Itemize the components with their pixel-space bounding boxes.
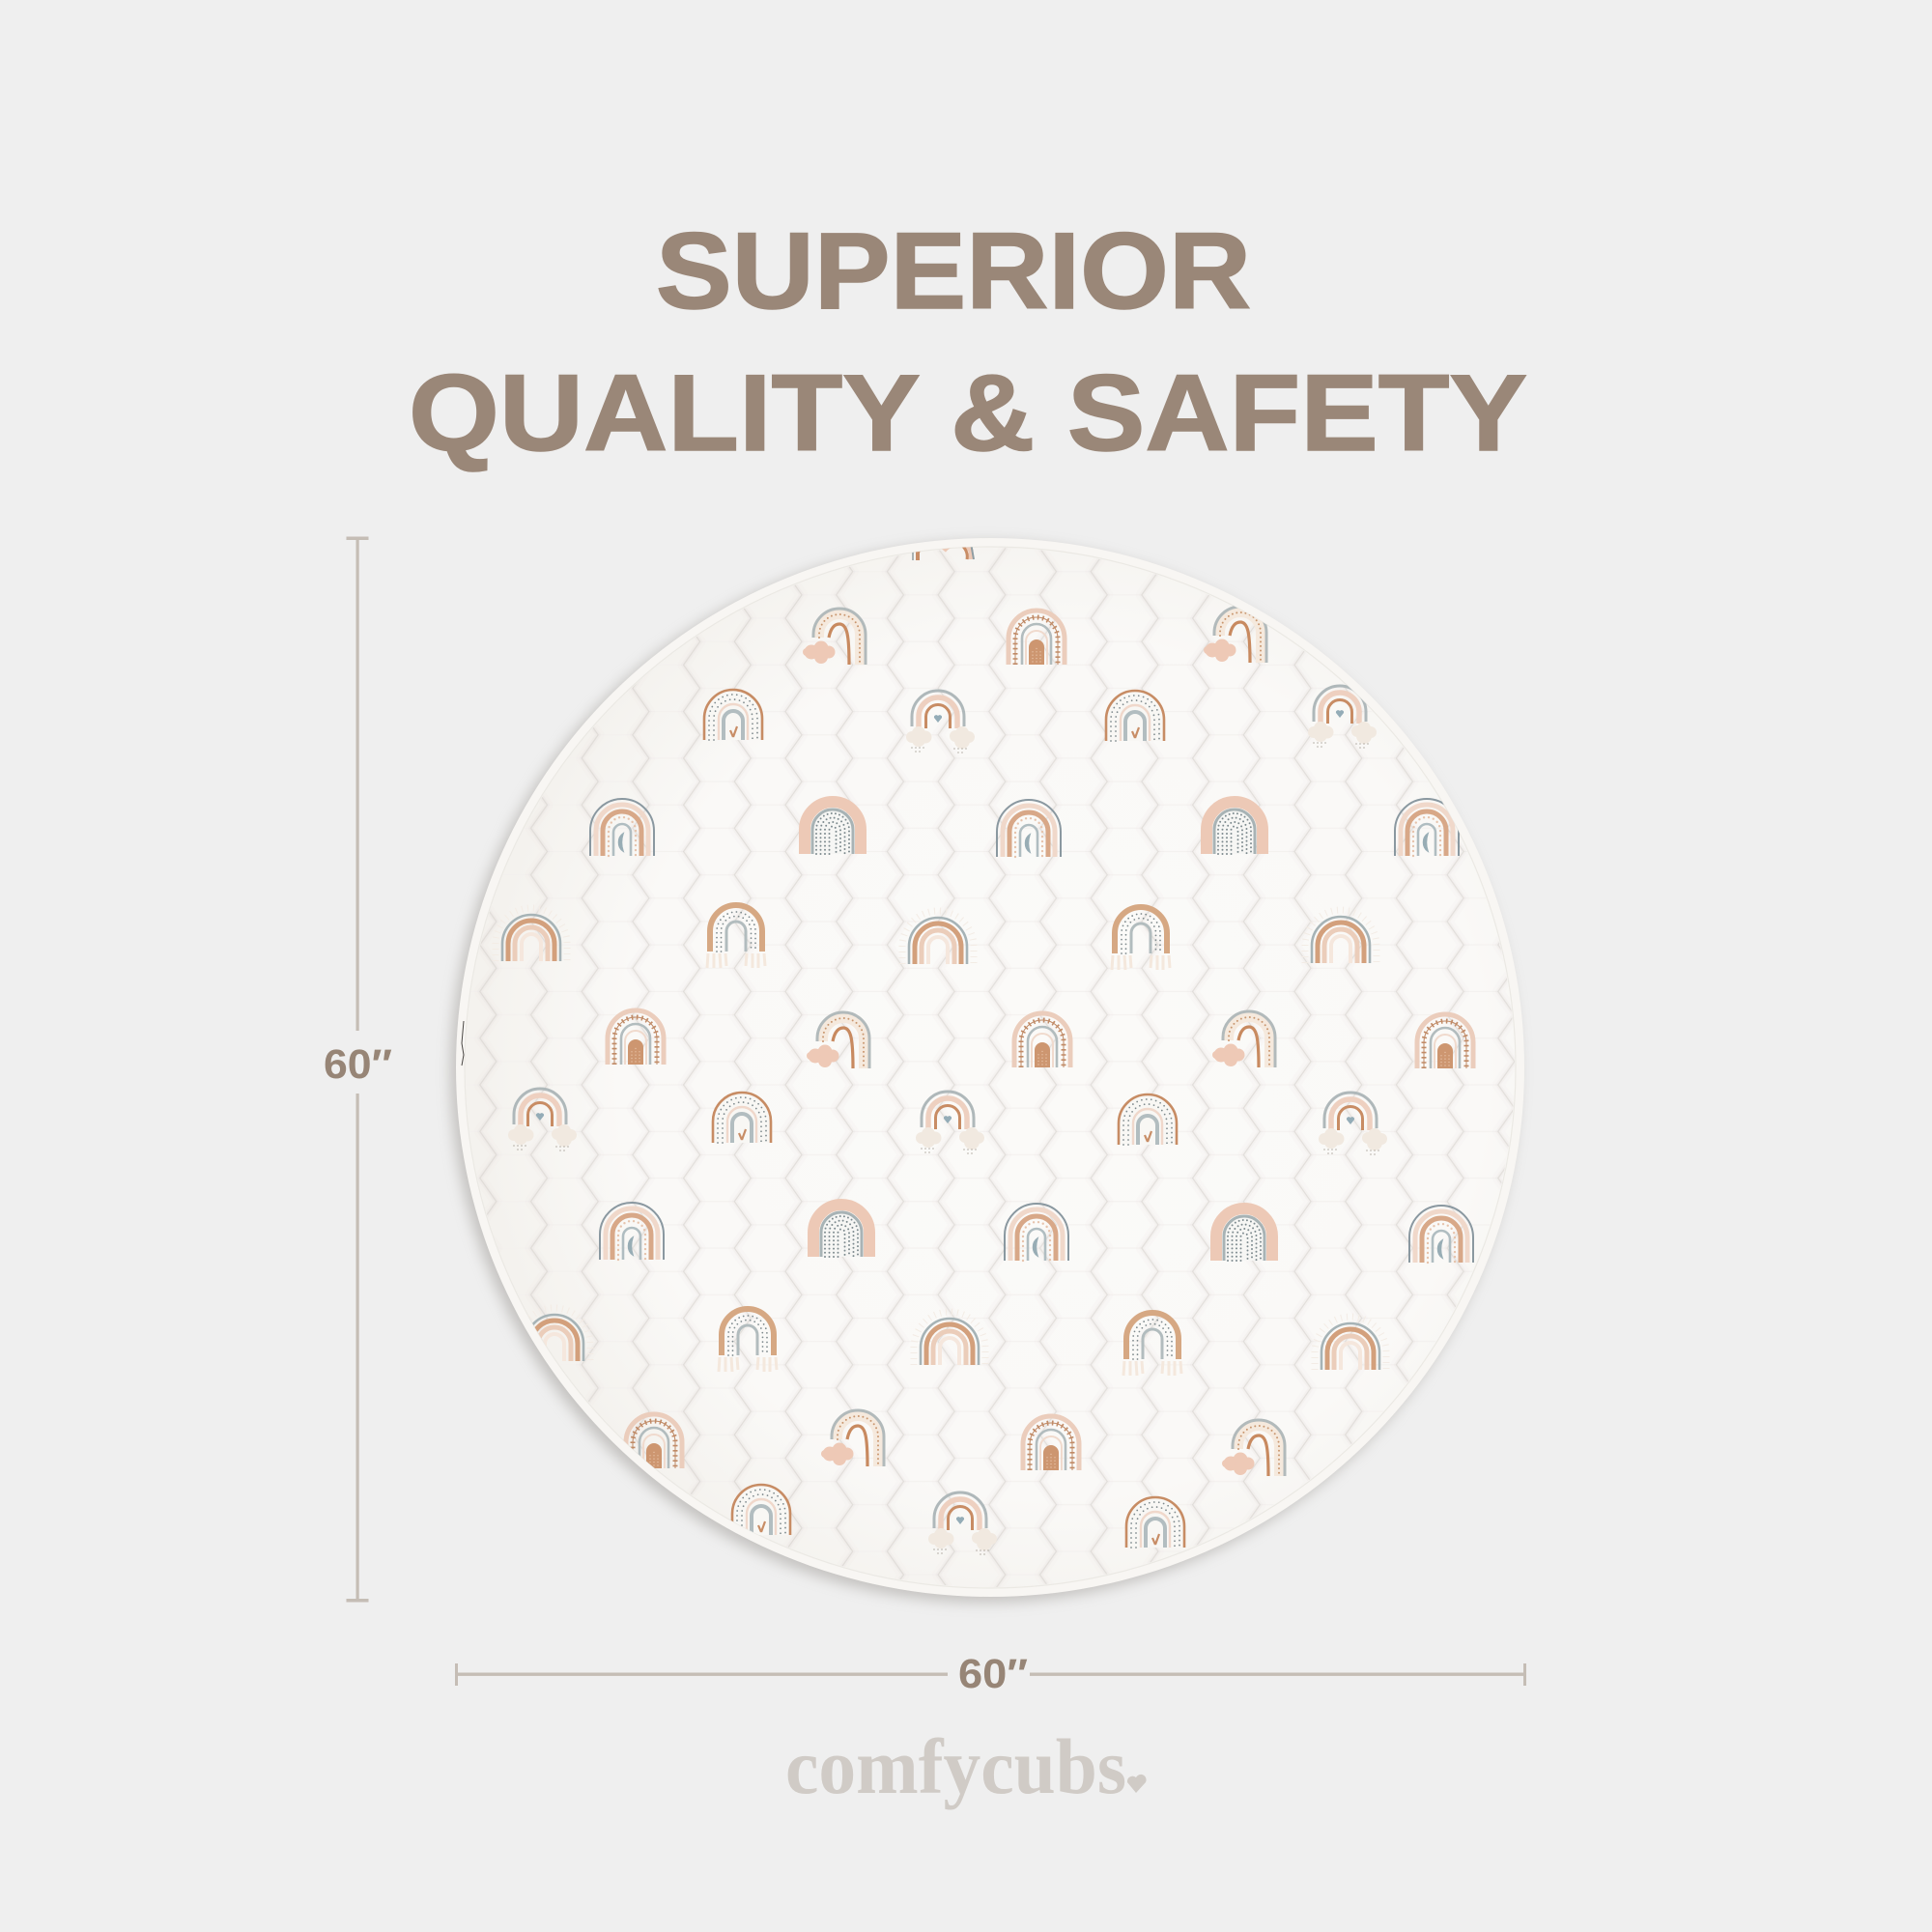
title bbox=[409, 211, 1527, 473]
rainbow with heart and clouds bbox=[916, 1092, 984, 1153]
row 6 rainbows bbox=[508, 1089, 1387, 1154]
rainbow with vines bbox=[608, 1010, 664, 1065]
rainbow with heart and clouds bbox=[508, 1089, 577, 1151]
rainbow with heart and clouds bbox=[906, 691, 975, 753]
row 2 rainbows bbox=[704, 686, 1377, 753]
rainbow with rays bbox=[496, 908, 567, 961]
rainbow with vines bbox=[1417, 1014, 1473, 1068]
rainbow with tassels bbox=[707, 905, 765, 968]
rainbow with cloud bbox=[1222, 1420, 1285, 1476]
rainbow with rays bbox=[519, 1308, 590, 1361]
rainbow with vines bbox=[626, 1414, 682, 1468]
row 9 rainbows bbox=[626, 1410, 1285, 1476]
speckled rainbow bbox=[1106, 691, 1164, 741]
speckled rainbow bbox=[704, 690, 762, 740]
logo wordmark: comfycubs bbox=[785, 1722, 1126, 1810]
speckled rainbow bbox=[713, 1093, 771, 1143]
width label: 60″ bbox=[958, 1651, 1028, 1697]
rainbow with cloud bbox=[807, 1012, 869, 1068]
rainbow with tassels bbox=[1112, 907, 1170, 970]
speckled rainbow bbox=[732, 1485, 790, 1535]
rainbow with moon bbox=[600, 1203, 664, 1260]
solid pink rainbow with dots bbox=[805, 802, 861, 854]
rainbow with rays bbox=[1315, 1317, 1386, 1370]
row 3 rainbows bbox=[590, 799, 1459, 857]
row 4 rainbows bbox=[496, 905, 1377, 970]
rainbow with moon bbox=[1005, 1204, 1068, 1261]
row 1 rainbows bbox=[803, 607, 1266, 665]
logo heart bbox=[1127, 1775, 1147, 1793]
rainbow with moon bbox=[590, 799, 654, 856]
comfycubs logo bbox=[785, 1722, 1147, 1810]
top clipped rainbows bbox=[912, 547, 975, 560]
solid pink rainbow with dots bbox=[1207, 802, 1263, 854]
rainbow with cloud bbox=[1212, 1011, 1275, 1067]
rainbow with rays bbox=[914, 1312, 985, 1365]
rainbow with heart and clouds bbox=[1308, 686, 1377, 748]
rainbow with moon bbox=[1409, 1206, 1473, 1263]
title line 1: SUPERIOR bbox=[656, 211, 1251, 331]
width dimension: 60 inches bbox=[455, 1651, 1526, 1697]
rainbow with vines bbox=[1014, 1013, 1070, 1067]
row 10 rainbows bbox=[732, 1485, 1184, 1554]
rainbow with vines bbox=[1023, 1416, 1079, 1470]
rainbow with moon bbox=[1395, 799, 1459, 856]
rainbow with vines bbox=[1009, 611, 1065, 665]
rainbow print bbox=[496, 543, 1473, 1554]
rainbow with cloud bbox=[803, 609, 866, 665]
rainbow with tassels bbox=[1123, 1313, 1181, 1376]
row 8 rainbows bbox=[519, 1308, 1386, 1376]
height dimension: 60 inches bbox=[324, 537, 392, 1602]
rainbow with moon bbox=[997, 800, 1061, 857]
rainbow with rays bbox=[1305, 910, 1377, 963]
title line 2: QUALITY & SAFETY bbox=[409, 353, 1527, 473]
rainbow with tassels bbox=[719, 1309, 777, 1372]
height label: 60″ bbox=[324, 1041, 392, 1088]
rainbow with rays bbox=[902, 911, 974, 964]
row 7 rainbows bbox=[600, 1203, 1473, 1263]
round quilted play mat bbox=[450, 538, 1524, 1603]
solid pink rainbow with dots bbox=[1216, 1208, 1272, 1261]
solid pink rainbow with dots bbox=[813, 1205, 869, 1257]
speckled rainbow bbox=[1119, 1094, 1177, 1145]
speckled rainbow bbox=[1126, 1497, 1184, 1548]
row 5 rainbows bbox=[608, 1010, 1473, 1068]
rainbow with heart and clouds bbox=[928, 1492, 997, 1554]
rainbow with heart and clouds bbox=[1319, 1093, 1387, 1154]
rainbow with cloud bbox=[1204, 607, 1266, 663]
rainbow with cloud bbox=[821, 1410, 884, 1466]
